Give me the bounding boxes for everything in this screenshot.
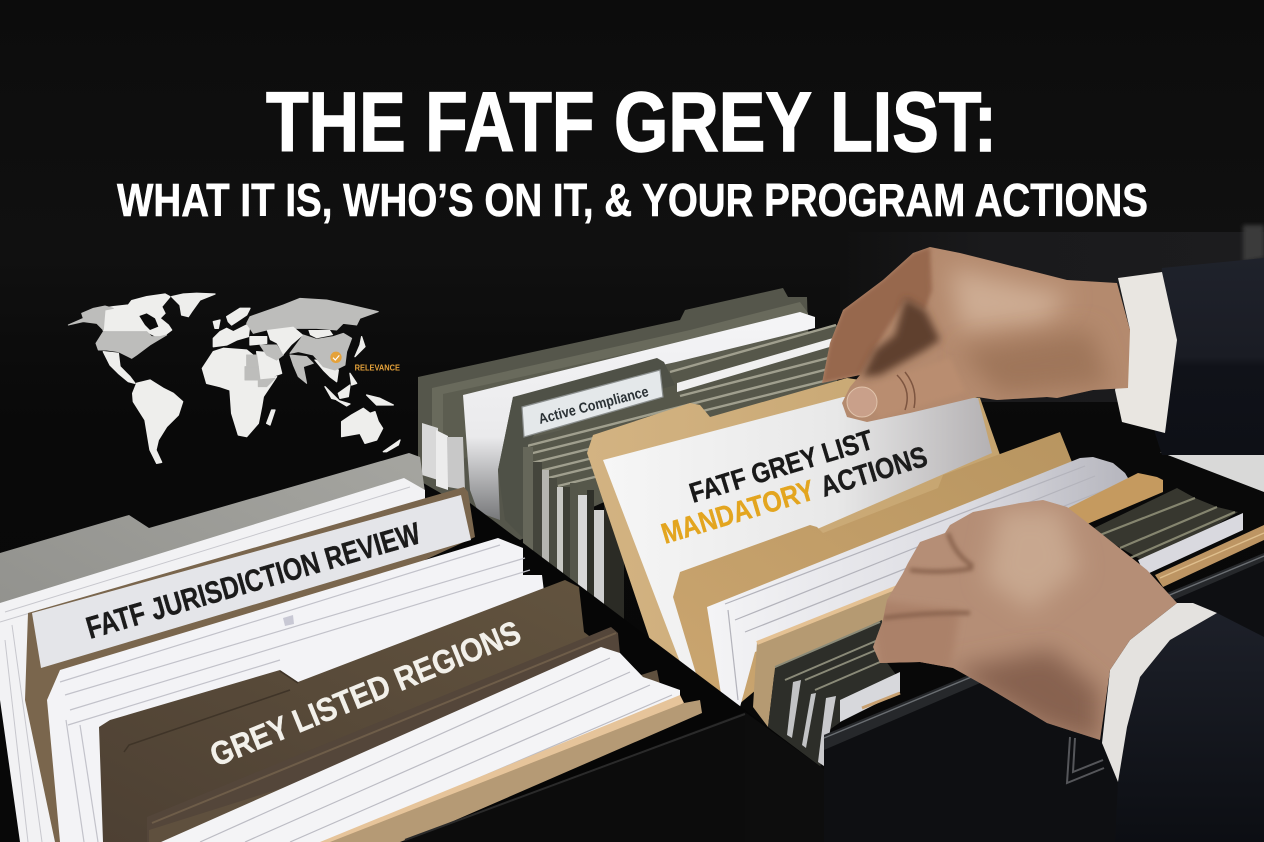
relevance marker — [330, 352, 400, 372]
hanging file slats — [523, 447, 624, 680]
divider wall and right drawer front — [405, 503, 1264, 842]
jacket sleeve — [1155, 258, 1264, 455]
highlighted grey countries — [68, 298, 378, 387]
hand — [873, 500, 1177, 740]
dark brown folder: grey listed regions: GREY LISTED REGIONS — [205, 613, 526, 773]
front paper stack — [161, 647, 702, 842]
document: FATF grey list mandatory actions — [603, 397, 992, 680]
label: active compliance: Active Compliance — [537, 384, 650, 428]
lower hand and sleeve — [873, 500, 1264, 782]
document: FATF grey list mandatory actions: FATF GREY LIST — [686, 424, 877, 509]
thumbnail — [847, 387, 877, 417]
left compartment: grey folder — [0, 453, 425, 700]
drawer compartment: active compliance files — [418, 288, 837, 680]
world map — [68, 293, 400, 463]
label: active compliance — [522, 370, 663, 437]
document: FATF grey list mandatory actions: ACTIONS — [817, 441, 931, 504]
upper hand and sleeve — [815, 240, 1264, 455]
file papers and slats — [707, 457, 1264, 770]
light countries — [103, 293, 400, 463]
label: FATF jurisdiction review: FATF JURISDICTION REVIEW — [82, 515, 425, 646]
dark brown folder: grey listed regions — [99, 580, 620, 842]
front brown folder — [147, 627, 661, 842]
label holder — [1067, 737, 1104, 783]
paper pile — [47, 538, 545, 842]
jacket sleeve — [1115, 613, 1264, 842]
document: FATF grey list mandatory actions: MANDATORY — [658, 475, 818, 551]
shirt cuff — [1115, 272, 1177, 433]
olive folder stripes — [523, 325, 837, 520]
title — [117, 75, 1148, 226]
tan folder — [587, 378, 1075, 720]
folder: active compliance — [498, 358, 675, 540]
brown folder with jurisdiction label — [25, 487, 475, 842]
relevance marker: RELEVANCE — [355, 362, 400, 372]
white papers behind label — [0, 478, 425, 842]
front tan folder — [673, 432, 1075, 720]
hand — [822, 247, 1130, 422]
white sheets behind — [463, 312, 815, 520]
left drawer front — [400, 712, 745, 842]
shirt cuff — [1102, 603, 1217, 782]
title: THE FATF GREY LIST: — [266, 75, 997, 169]
